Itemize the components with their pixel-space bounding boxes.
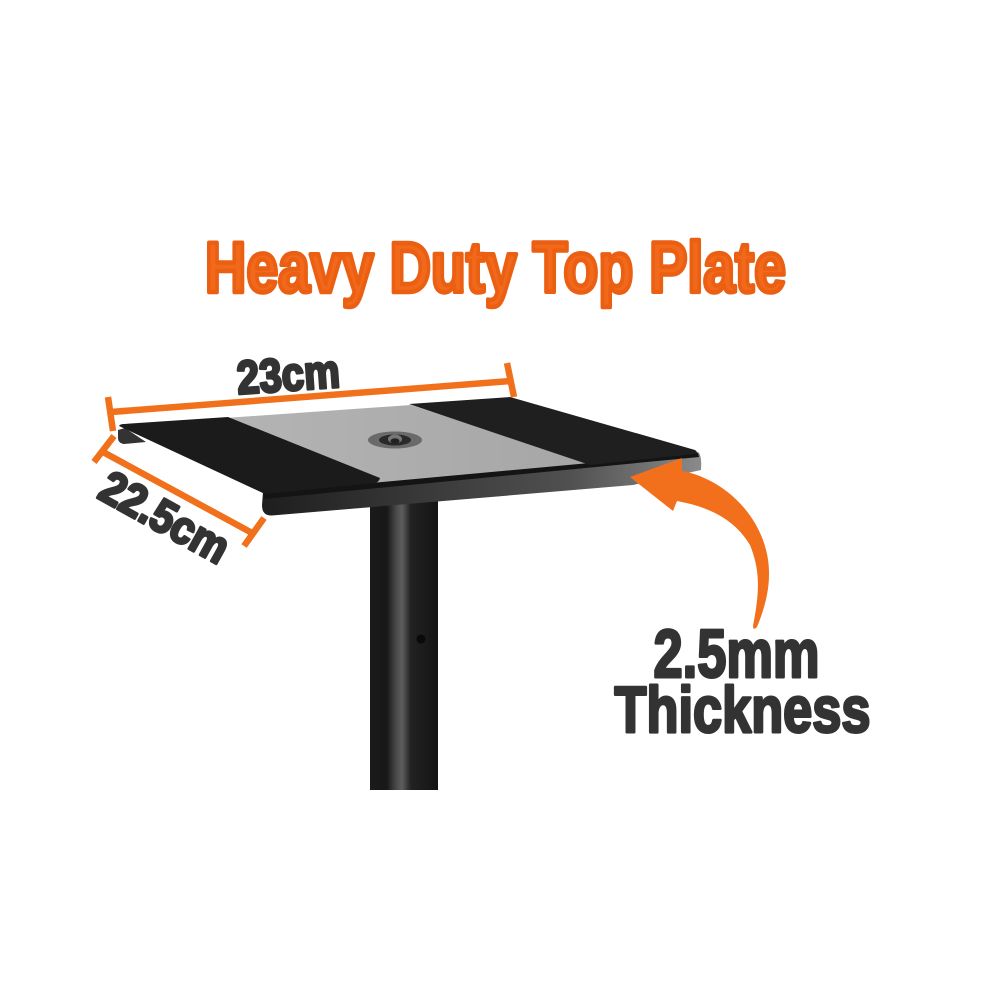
label: 22.5cm: 22.5cm bbox=[91, 460, 239, 574]
top plate rear left lip bbox=[118, 428, 146, 444]
thickness callout bbox=[614, 616, 870, 746]
dimension line: width bbox=[108, 363, 514, 431]
arrow: curved pointer to plate edge bbox=[630, 458, 769, 629]
plate fold shadow line bbox=[263, 453, 699, 499]
gray centre plate bbox=[225, 405, 590, 484]
title: Heavy Duty Top Plate bbox=[205, 229, 786, 308]
dimension line: depth bbox=[94, 436, 264, 546]
right black pad bbox=[409, 397, 697, 465]
left black pad bbox=[119, 417, 380, 494]
callout value: 2.5mm bbox=[654, 616, 820, 692]
top plate front lip bbox=[262, 452, 701, 516]
centre bolt hole bbox=[368, 432, 422, 448]
label: 23cm: 23cm bbox=[235, 344, 341, 404]
speaker stand illustration bbox=[118, 397, 701, 790]
stand pole bbox=[370, 500, 438, 790]
callout label: Thickness bbox=[614, 673, 870, 746]
